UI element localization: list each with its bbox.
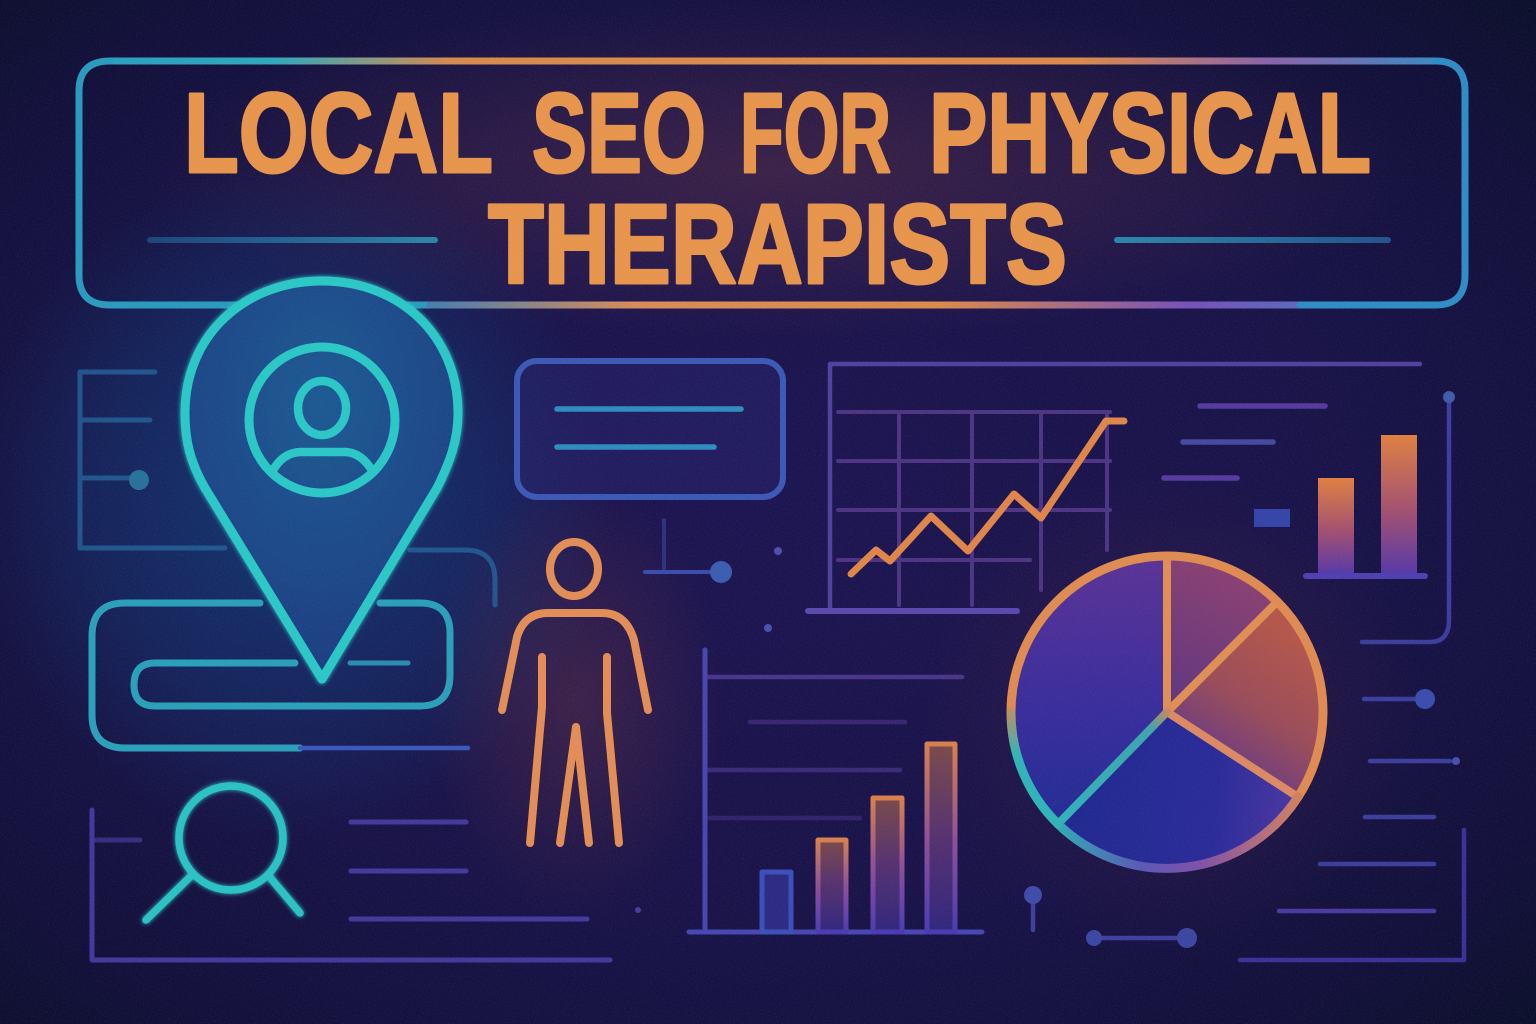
bars (762, 872, 791, 932)
slice: purple-blue (1011, 556, 1167, 824)
bars (1254, 509, 1290, 527)
banner accent line: right (1117, 237, 1388, 243)
pie rim (1011, 556, 1323, 797)
circuit lines: left panel (80, 372, 495, 605)
pie dividers (1167, 556, 1277, 712)
pie chart (1011, 556, 1323, 868)
slice: maroon (1167, 556, 1277, 712)
title banner (79, 61, 1465, 307)
chart grid (838, 412, 1110, 605)
bottom bar chart (689, 650, 982, 932)
grid lines (708, 677, 962, 818)
baseline (1306, 573, 1425, 579)
connector dots (645, 520, 782, 632)
location bar (92, 603, 468, 748)
bottom connector (1024, 886, 1197, 948)
text card (517, 361, 783, 497)
axes (689, 650, 982, 932)
background glow: title (140, 0, 1420, 340)
title: LOCAL (184, 70, 493, 196)
background glow: figure (425, 480, 725, 920)
text lines (1164, 406, 1325, 478)
icon: magnifier (146, 786, 300, 920)
card frame (517, 361, 783, 497)
chart axes (830, 364, 1420, 610)
title: THERAPISTS (488, 181, 1067, 307)
slice: red-orange (1167, 602, 1323, 797)
title (184, 70, 1371, 307)
banner frame (79, 61, 1465, 305)
right circuit (1240, 391, 1464, 960)
banner accent line: left (150, 237, 435, 243)
title: SEO (532, 70, 706, 196)
bottom left lines (92, 810, 641, 960)
title: PHYSICAL (929, 70, 1371, 196)
background glow: pin (0, 160, 610, 840)
icon: map pin with person (185, 281, 458, 679)
small bar chart (1164, 406, 1425, 576)
chart trend line (851, 421, 1124, 574)
background glow: pie (920, 470, 1420, 950)
title: FOR (740, 70, 891, 196)
line chart (808, 364, 1420, 611)
card lines (557, 406, 741, 412)
slice: blue (1058, 712, 1298, 868)
icon: human figure (502, 542, 648, 843)
